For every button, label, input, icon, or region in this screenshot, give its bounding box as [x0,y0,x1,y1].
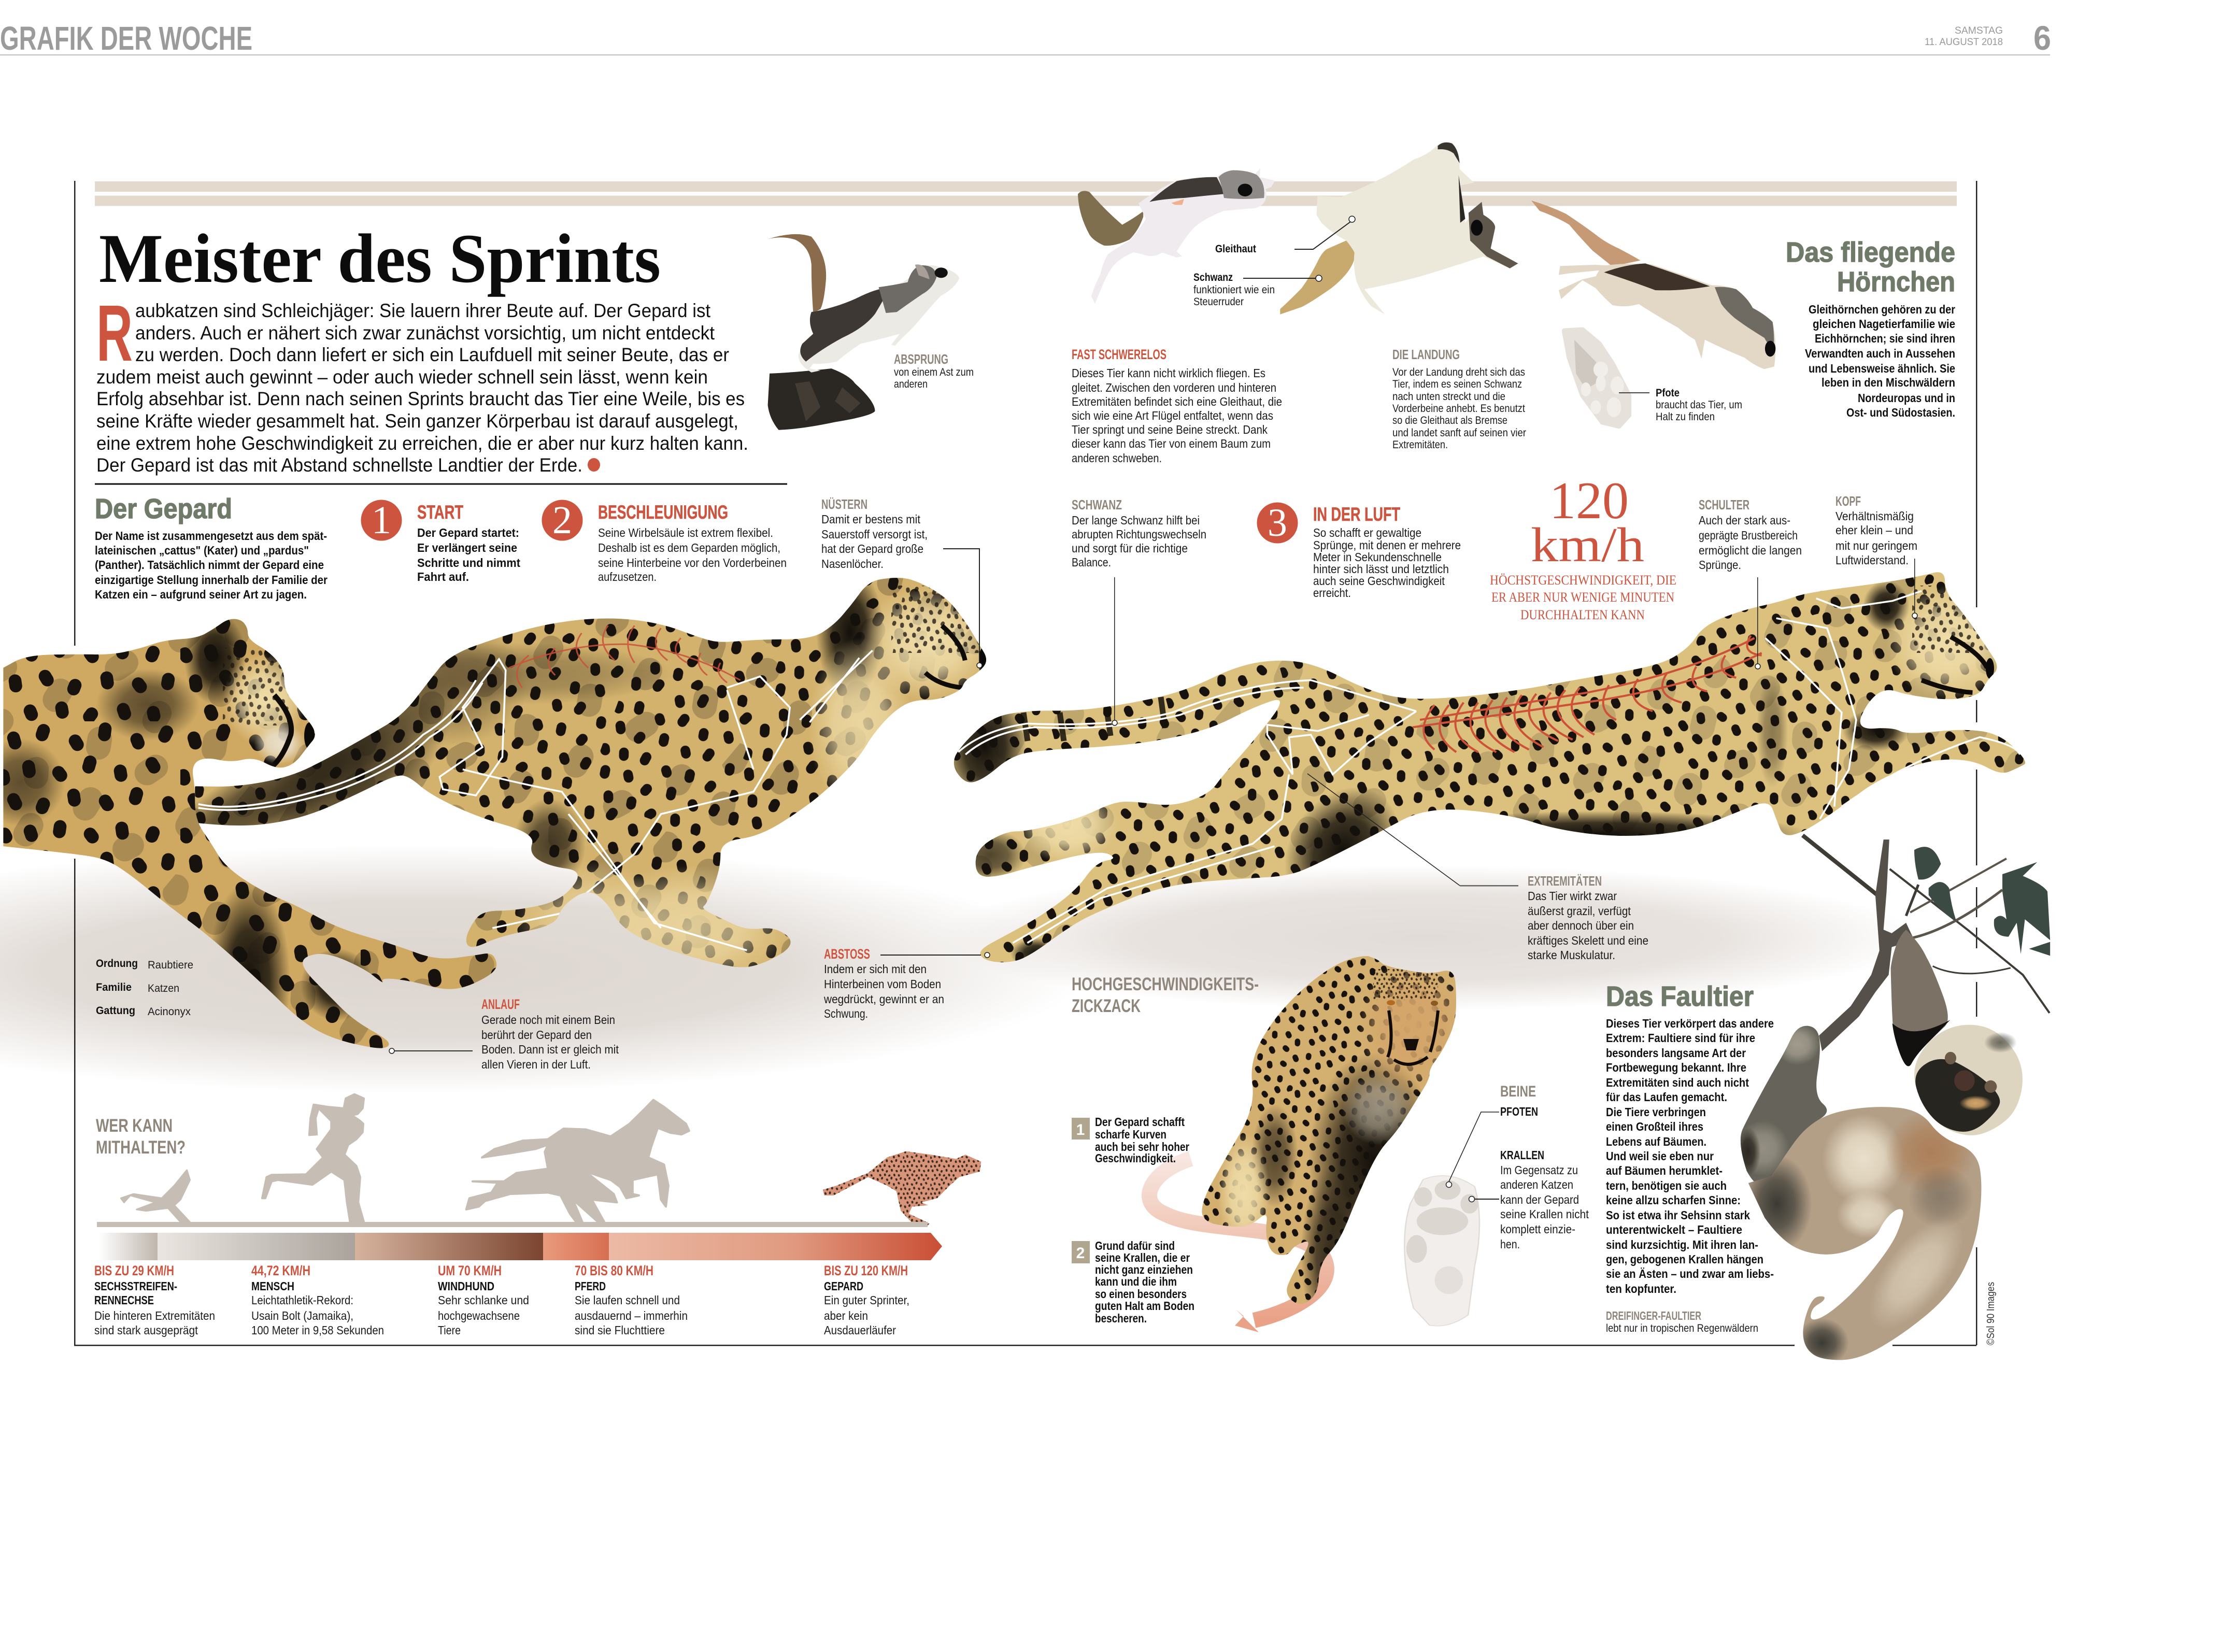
legend: sechsstreifen-rennechse: Die hinteren Extremitäten [94,1309,215,1322]
step 1: start: Fahrt auf. [417,570,469,583]
step 2: beschleunigung: aufzusetzen. [598,570,657,583]
note 1: kurven: auch bei sehr hoher [1095,1140,1189,1153]
annotation: anlauf [389,996,619,1071]
step 1: start: 1 [372,499,391,542]
annotation: extremitäten: EXTREMITÄTEN [1528,873,1602,889]
panel: das faultier: Fortbewegung bekannt. Ihre [1606,1061,1746,1074]
text: die landung: Extremitäten. [1392,439,1448,451]
panel: das faultier: sie an Ästen – und zwar am liebs- [1606,1267,1774,1280]
annotation: schwanz of squirrel [1193,272,1322,308]
legend: pferd: sind sie Fluchttiere [575,1323,665,1337]
panel: der gepard: (Panther). Tatsächlich nimmt der Gepard eine [95,558,324,572]
note 1: kurven: Geschwindigkeit. [1095,1151,1176,1165]
annotation: anlauf: allen Vieren in der Luft. [481,1058,591,1071]
annotation: abstoss: wegdrückt, gewinnt er an [823,992,944,1006]
page header: GRAFIK DER WOCHE [0,20,252,57]
taxonomy table [96,958,193,1018]
annotation: anlauf: Boden. Dann ist er gleich mit [481,1043,619,1056]
text: fast schwerelos: dieser kann das Tier von einem Baum zum [1072,437,1271,450]
annotation: kopf: KOPF [1835,493,1861,509]
panel: das fliegende hörnchen: und Lebensweise ähnlich. Sie [1809,362,1955,375]
annotation: beine: BEINE [1500,1083,1536,1100]
taxonomy table: Acinonyx [148,1006,191,1018]
panel: der gepard: Katzen ein – aufgrund seiner Art zu jagen. [95,588,307,601]
step 3: in der luft: Sprünge, mit denen er mehrere [1313,538,1461,552]
panel: das fliegende hörnchen: Das fliegende [1786,237,1955,268]
page header [0,19,2051,57]
text: die landung: Vor der Landung dreht sich das [1392,366,1525,378]
title: Meister des Sprints [99,220,661,297]
panel: der gepard: Der Gepard [95,493,232,524]
panel: das faultier: Das Faultier [1606,981,1754,1012]
sloth hanging from branch [1736,835,2050,1377]
icon: cheetah paw [1404,1176,1479,1326]
step 3: in der luft: Meter in Sekundenschnelle [1313,550,1442,564]
note 2: krallen: guten Halt am Boden [1095,1299,1194,1313]
intro text [95,289,787,485]
taxonomy table: Familie [96,981,132,993]
note 2: krallen: 2 [1076,1245,1085,1262]
annotation: absprung: von einem Ast zum [894,366,974,378]
panel: das faultier: auf Bäumen herumklet- [1606,1164,1723,1177]
text: fast schwerelos: Dieses Tier kann nicht wirklich fliegen. Es [1072,366,1265,380]
panel: das faultier: Und weil sie eben nur [1606,1149,1714,1163]
text: die landung: DIE LANDUNG [1392,347,1460,362]
panel: das faultier: DREIFINGER-FAULTIER [1606,1309,1701,1322]
annotation: beine: seine Krallen nicht [1500,1207,1589,1221]
annotation: schulter: Sprünge. [1699,558,1741,572]
taxonomy table: Katzen [148,982,179,994]
icon: horse and greyhound [466,1100,689,1222]
text: fast schwerelos: anderen schweben. [1072,451,1162,465]
ground haze [0,845,1917,1093]
panel: das faultier: keine allzu scharfen Sinne: [1606,1193,1741,1207]
legend: mensch: 44,72 KM/H [251,1263,310,1278]
panel: das fliegende hörnchen: Verwandten auch in Aussehen [1805,347,1955,360]
legend: windhund: Tiere [438,1323,461,1337]
intro text: Der Gepard ist das mit Abstand schnellste Landtier der Erde. [96,454,582,476]
step 1: start: Der Gepard startet: [417,526,519,539]
annotation: kopf: eher klein – und [1835,523,1913,537]
annotation: schwanz of cheetah: abrupten Richtungswechseln [1072,528,1206,541]
annotation: absprung: ABSPRUNG [894,351,948,367]
annotation: extremitäten [1307,774,1648,962]
step 3: in der luft: So schafft er gewaltige [1313,526,1421,539]
cheetah: frontal zigzag [1149,948,1467,1342]
annotation: pfote: braucht das Tier, um [1656,399,1742,411]
annotation: beine: anderen Katzen [1500,1178,1573,1191]
ribs: right cheetah [1413,636,1762,752]
heading: wer kann mithalten [96,1116,186,1158]
heading: zickzack: HOCHGESCHWINDIGKEITS- [1072,974,1259,994]
step 2: beschleunigung: seine Hinterbeine vor den Vorderbeinen [598,556,787,569]
icon: squirrel diving [1531,201,1775,369]
legend: windhund: Sehr schlanke und [438,1293,529,1307]
step 3: in der luft: erreicht. [1313,586,1351,600]
taxonomy table: Raubtiere [148,959,193,971]
heading: wer kann mithalten: WER KANN [96,1116,173,1136]
annotation: schwanz of cheetah: Der lange Schwanz hilft bei [1072,514,1200,527]
legend: sechsstreifen-rennechse [94,1263,215,1337]
step 3: in der luft [1257,501,1461,600]
text: die landung: Tier, indem es seinen Schwanz [1392,378,1522,390]
annotation: schwanz of squirrel: funktioniert wie ein [1193,284,1275,296]
text: die landung: und landet sanft auf seinen vier [1392,427,1526,439]
panel: das faultier: unterentwickelt – Faultiere [1606,1223,1742,1236]
annotation: schwanz of squirrel: Steuerruder [1193,296,1244,308]
text: die landung: so die Gleithaut als Bremse [1392,415,1507,426]
step 2: beschleunigung: Deshalb ist es dem Geparden möglich, [598,541,780,554]
icon: lizard [121,1170,190,1222]
text: die landung: Vorderbeine anhebt. Es benutzt [1392,403,1525,415]
legend: windhund: hochgewachsene [438,1309,520,1322]
legend: gepard [824,1263,909,1337]
annotation: extremitäten: äußerst grazil, verfügt [1528,904,1631,918]
annotation: beine: KRALLEN [1500,1148,1544,1162]
icon: cheetah silhouette [798,1145,985,1238]
photo credit: ©Sol 90 Images [1985,1282,1997,1345]
legend: pferd: Sie laufen schnell und [575,1293,680,1307]
note 1: kurven: Der Gepard schafft [1095,1115,1185,1129]
panel: das faultier: Extrem: Faultiere sind für ihre [1606,1031,1755,1045]
cheetah: running, cropped at left edge [3,619,496,1048]
legend: mensch: 100 Meter in 9,58 Sekunden [251,1323,384,1337]
callout: 120 km/h: 120 [1549,472,1629,530]
note 1: kurven: 1 [1076,1121,1085,1138]
annotation: abstoss: Schwung. [824,1007,868,1020]
panel: das fliegende hörnchen: gleichen Nagetierfamilie wie [1813,317,1955,331]
page header: 11. AUGUST 2018 [1925,37,2003,48]
callout: 120 km/h: HÖCHSTGESCHWINDIGKEIT, DIE [1490,573,1676,588]
legend: sechsstreifen-rennechse: BIS ZU 29 KM/H [94,1263,174,1278]
legend: mensch: Usain Bolt (Jamaika), [251,1309,353,1322]
note 1: kurven [1072,1115,1189,1165]
annotation: nüstern: NÜSTERN [821,496,867,512]
annotation: schulter: SCHULTER [1699,497,1749,512]
skeleton: middle cheetah [198,650,873,950]
annotation: extremitäten: kräftiges Skelett und eine [1528,934,1648,947]
legend: windhund: UM 70 KM/H [438,1263,502,1278]
panel: der gepard [95,493,328,601]
ground line [97,1222,928,1227]
legend: gepard: Ein guter Sprinter, [824,1293,909,1307]
annotation: beine: PFOTEN [1500,1105,1538,1118]
panel: das fliegende hörnchen: Gleithörnchen gehören zu der [1809,303,1955,316]
heading: zickzack: ZICKZACK [1072,996,1141,1016]
icon: squirrel paw [1564,330,1629,426]
legend: gepard: aber kein [824,1309,868,1322]
annotation: schwanz of cheetah: und sorgt für die richtige [1072,542,1188,555]
panel: das faultier [1606,981,1774,1334]
intro text: Erfolg absehbar ist. Denn nach seinen Sprints braucht das Tier eine Weile, bis es [96,388,745,409]
icon: squirrel take-off on bark [768,234,959,430]
text: fast schwerelos: FAST SCHWERELOS [1072,347,1166,362]
panel: das fliegende hörnchen: Nordeuropas und in [1858,391,1955,405]
callout: 120 km/h: ER ABER NUR WENIGE MINUTEN [1491,590,1674,605]
annotation: extremitäten: starke Muskulatur. [1528,948,1615,962]
page header: 6 [2033,19,2051,57]
chart: speed gradient arrow [99,1233,942,1260]
annotation: abstoss: Indem er sich mit den [824,962,927,976]
step 3: in der luft: IN DER LUFT [1313,504,1400,525]
step 1: start: Schritte und nimmt [417,556,520,569]
legend: pferd: 70 BIS 80 KM/H [575,1263,653,1278]
annotation: anlauf: berührt der Gepard den [481,1028,592,1042]
text: die landung [1392,347,1526,451]
left arm [1736,1020,1839,1211]
panel: das faultier: ten kopfunter. [1606,1282,1676,1295]
page header: SAMSTAG [1955,25,2003,36]
icon: runner [262,1094,364,1222]
panel: das faultier: einen Großteil ihres [1606,1120,1703,1133]
annotation: anlauf: Gerade noch mit einem Bein [481,1013,615,1027]
head [1914,1025,2023,1135]
annotation: schulter: Auch der stark aus- [1699,514,1790,527]
intro text: seine Kräfte wieder gesammelt hat. Sein ganzer Körperbau ist darauf ausgelegt, [96,410,738,432]
cheetah: mid-air pose [954,572,2025,962]
step 1: start: Er verlängert seine [417,541,517,554]
text: fast schwerelos: sich wie eine Art Flügel entfaltet, wenn das [1072,409,1273,422]
annotation: anlauf: ANLAUF [481,996,520,1012]
frame lines [74,181,1977,1346]
legend: sechsstreifen-rennechse: SECHSSTREIFEN- [94,1279,177,1293]
text: die landung: nach unten streckt und die [1392,391,1505,403]
annotation: pfote [1619,387,1742,423]
panel: das faultier: tern, benötigen sie auch [1606,1179,1727,1192]
legend: windhund: WINDHUND [438,1279,494,1293]
annotation: schulter: ermöglicht die langen [1699,544,1802,557]
panel: das faultier: Extremitäten sind auch nicht [1606,1076,1749,1089]
annotation: gleithaut [1215,216,1355,255]
panel: der gepard: lateinischen „cattus" (Kater) und „pardus" [95,544,309,557]
panel: das fliegende hörnchen: Eichhörnchen; sie sind ihren [1815,332,1955,345]
panel: das faultier: besonders langsame Art der [1606,1046,1746,1060]
annotation: nüstern: Sauerstoff versorgt ist, [821,528,928,541]
panel: das fliegende hörnchen: leben in den Mischwäldern [1822,376,1955,389]
icon: squirrel landing, membrane spread [1280,143,1518,315]
callout: 120 km/h [1490,472,1676,622]
legend: gepard: Ausdauerläufer [824,1323,896,1337]
annotation: nüstern: Nasenlöcher. [821,557,884,571]
annotation: beine [1446,1083,1589,1251]
heading: wer kann mithalten: MITHALTEN? [96,1137,186,1158]
annotation: beine: komplett einzie- [1500,1222,1575,1236]
step 2: beschleunigung: BESCHLEUNIGUNG [598,502,728,523]
annotation: abstoss: ABSTOSS [824,946,870,962]
annotation: schwanz of cheetah: Balance. [1072,556,1111,569]
step 1: start [361,499,520,583]
step 3: in der luft: auch seine Geschwindigkeit [1313,574,1445,588]
annotation: beine: Im Gegensatz zu [1500,1163,1578,1177]
annotation: beine: kann der Gepard [1500,1193,1579,1206]
panel: das faultier: Dieses Tier verkörpert das andere [1606,1017,1774,1030]
text: fast schwerelos: gleitet. Zwischen den vorderen und hinteren [1072,381,1276,394]
infographic page [0,26,2050,1360]
panel: das faultier: So ist etwa ihr Sehsinn stark [1606,1208,1750,1222]
panel: der gepard: Der Name ist zusammengesetzt aus dem spät- [95,529,327,543]
panel: der gepard: einzigartige Stellung innerhalb der Familie der [95,573,328,587]
annotation: absprung [894,351,974,390]
step 3: in der luft: hinter sich lässt und letztlich [1313,562,1449,576]
step 3: in der luft: 3 [1268,501,1287,545]
branch and leaves [1803,835,2050,1051]
step 2: beschleunigung [542,499,787,583]
legend: mensch [251,1263,384,1337]
drop cap: R [96,289,133,378]
ribs: middle cheetah [509,625,741,688]
cheetah: start and acceleration pose [195,578,987,967]
step 1: start: START [417,502,463,523]
annotation: pfote: Pfote [1656,387,1680,399]
taxonomy table: Ordnung [96,958,138,970]
note 2: krallen: bescheren. [1095,1312,1147,1325]
text: fast schwerelos: Extremitäten befindet sich eine Gleithaut, die [1072,395,1282,408]
legend: mensch: MENSCH [251,1279,294,1293]
text: fast schwerelos: Tier springt und seine Beine streckt. Dank [1072,423,1268,436]
panel: das faultier: für das Laufen gemacht. [1606,1090,1727,1104]
note 2: krallen: kann und die ihm [1095,1275,1177,1288]
legend: sechsstreifen-rennechse: RENNECHSE [94,1293,154,1307]
panel: das faultier: Die Tiere verbringen [1606,1105,1706,1119]
annotation: nüstern [821,496,982,668]
legend: windhund [438,1263,529,1337]
panel: das faultier: Lebens auf Bäumen. [1606,1135,1706,1148]
arrow: zigzag path [1149,1159,1327,1332]
legend: pferd: ausdauernd – immerhin [575,1309,688,1322]
legend: pferd [575,1263,688,1337]
annotation: absprung: anderen [894,378,928,390]
icon: squirrel gliding side [1078,168,1275,304]
step 2: beschleunigung: 2 [552,499,572,542]
annotation: gleithaut: Gleithaut [1215,243,1256,255]
note 2: krallen: nicht ganz einziehen [1095,1263,1193,1276]
annotation: nüstern: Damit er bestens mit [821,512,921,526]
callout: 120 km/h: km/h [1531,518,1644,572]
panel: das faultier: lebt nur in tropischen Regenwäldern [1606,1322,1758,1334]
annotation: beine: hen. [1500,1237,1520,1251]
skeleton: right cheetah [958,591,2020,943]
note 2: krallen: so einen besonders [1095,1287,1187,1301]
panel: das fliegende hörnchen: Hörnchen [1837,266,1955,297]
intro text: zu werden. Doch dann liefert er sich ein Laufduell mit seiner Beute, das er [135,344,729,365]
annotation: kopf: Verhältnismäßig [1835,509,1914,523]
step 2: beschleunigung: Seine Wirbelsäule ist extrem flexibel. [598,526,773,539]
chart: speed comparison silhouettes [121,1094,985,1238]
panel: das faultier: sind kurzsichtig. Mit ihren lan- [1606,1238,1758,1251]
heading: zickzack [1072,974,1259,1016]
note 2: krallen: seine Krallen, die er [1095,1251,1190,1264]
annotation: schulter: geprägte Brustbereich [1699,529,1798,542]
note 2: krallen [1072,1239,1194,1325]
annotation: kopf [1835,493,1917,618]
intro text: anders. Auch er nähert sich zwar zunächst vorsichtig, um nicht entdeckt [135,322,715,344]
intro text: eine extrem hohe Geschwindigkeit zu erreichen, die er aber nur kurz halten kann. [96,433,748,454]
text: fast schwerelos [1072,347,1282,465]
header bands [95,181,1957,206]
panel: das fliegende hörnchen [1786,237,1955,419]
taxonomy table: Gattung [96,1005,135,1017]
annotation: kopf: Luftwiderstand. [1835,553,1909,567]
note 2: krallen: Grund dafür sind [1095,1239,1175,1252]
annotation: abstoss: Hinterbeinen vom Boden [824,977,941,991]
legend: mensch: Leichtathletik-Rekord: [251,1293,353,1307]
annotation: kopf: mit nur geringem [1835,539,1917,552]
note 1: kurven: scharfe Kurven [1095,1128,1166,1141]
intro text: zudem meist auch gewinnt – oder auch wieder schnell sein lässt, wenn kein [96,366,708,388]
annotation: schulter [1699,497,1802,669]
annotation: extremitäten: Das Tier wirkt zwar [1528,889,1617,903]
legend: gepard: GEPARD [824,1279,863,1293]
intro text: aubkatzen sind Schleichjäger: Sie lauern ihrer Beute auf. Der Gepard ist [135,300,711,321]
annotation: abstoss [823,946,990,1020]
annotation: schwanz of cheetah [1072,497,1206,725]
legend: gepard: BIS ZU 120 KM/H [824,1263,908,1278]
legend: sechsstreifen-rennechse: sind stark ausgeprägt [94,1323,198,1337]
legend: pferd: PFERD [575,1279,606,1293]
annotation: schwanz of cheetah: SCHWANZ [1072,497,1122,512]
callout: 120 km/h: DURCHHALTEN KANN [1520,607,1645,622]
right arm [1891,930,1948,1066]
annotation: schwanz of squirrel: Schwanz [1193,272,1233,283]
panel: das fliegende hörnchen: Ost- und Südostasien. [1846,406,1955,419]
annotation: nüstern: hat der Gepard große [821,542,923,556]
annotation: pfote: Halt zu finden [1656,411,1715,423]
body [1736,1100,2002,1377]
panel: das faultier: gen, gebogenen Krallen hängen [1606,1252,1763,1266]
annotation: extremitäten: aber dennoch über ein [1528,919,1634,932]
